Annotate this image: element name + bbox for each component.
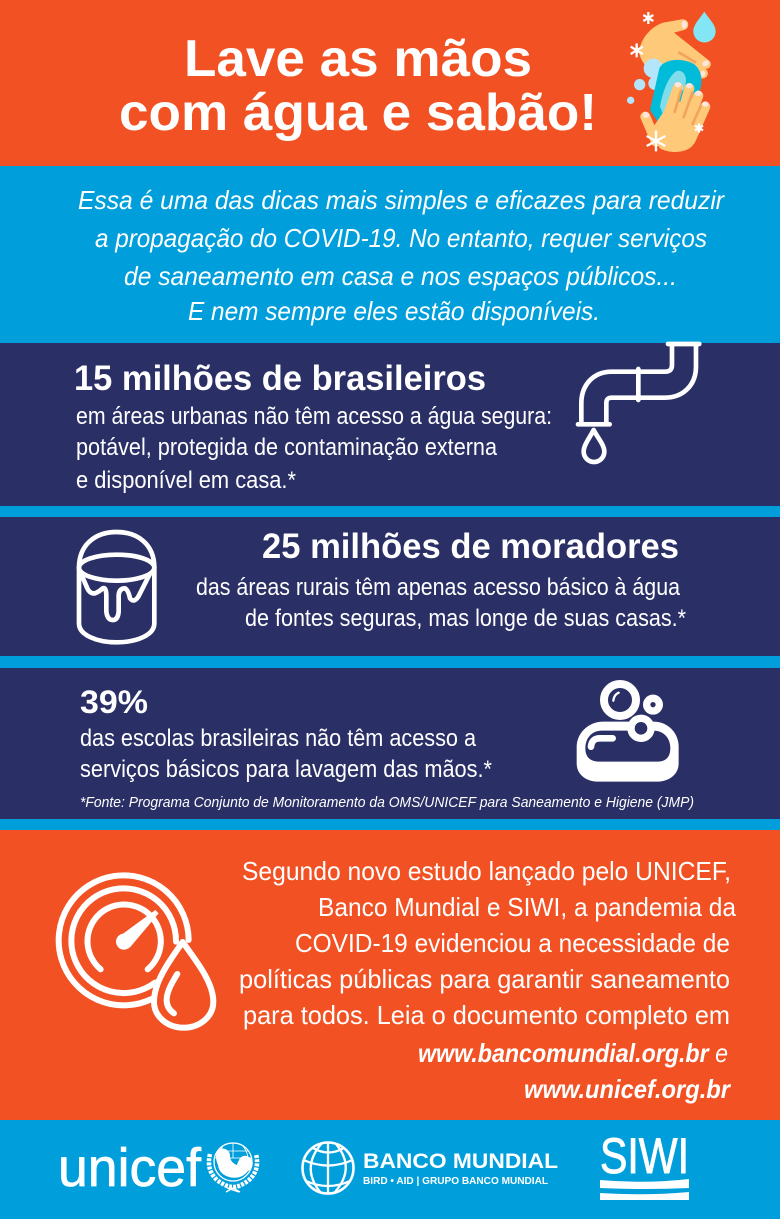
logo: Banco Mundial [302, 1142, 558, 1194]
icon: washing hands with soap [627, 12, 716, 152]
text block: study: para todos. Leia o documento completo em [243, 1000, 730, 1030]
icon: dripping pipe [578, 344, 699, 462]
text block: rural water: de fontes seguras, mas longe de suas casas.* [245, 605, 686, 632]
panel: urban water statistic [0, 343, 780, 506]
title [119, 30, 597, 142]
text block: study: Banco Mundial e SIWI, a pandemia da [318, 892, 737, 922]
logo: SIWI: SIWI [600, 1128, 689, 1184]
logo: Banco Mundial: BANCO MUNDIAL [363, 1150, 558, 1173]
panel: partner logos [0, 1120, 780, 1219]
source note: *Fonte: Programa Conjunto de Monitoramento da OMS/UNICEF para Saneamento e Higiene (JMP) [80, 794, 694, 811]
title: Lave as mãos [184, 30, 532, 88]
logo: Banco Mundial: BIRD • AID | GRUPO BANCO MUNDIAL [363, 1176, 548, 1187]
text block: urban water [76, 403, 552, 494]
text block: study: COVID-19 evidenciou a necessidade de [295, 928, 730, 958]
divider band [0, 506, 780, 517]
logo: SIWI [600, 1128, 689, 1200]
logo: unicef: unicef [58, 1138, 202, 1198]
title: com água e sabão! [119, 84, 597, 142]
panel: title header [0, 0, 780, 166]
heading: 25 milhões: 25 milhões de moradores [262, 527, 679, 566]
icon: bucket [79, 532, 154, 642]
text block: introduction [78, 185, 725, 326]
text block: introduction: Essa é uma das dicas mais simples e eficazes para reduzir [78, 185, 725, 215]
panel: rural water statistic [0, 517, 780, 656]
heading: 15 milhões: 15 milhões de brasileiros [74, 359, 486, 398]
text block: schools: das escolas brasileiras não têm acesso a [80, 725, 477, 752]
text block: rural water: das áreas rurais têm apenas acesso básico à água [196, 574, 681, 601]
text block: introduction: E nem sempre eles estão disponíveis. [188, 296, 600, 326]
icon: globe [302, 1142, 354, 1194]
icon: soap and bubbles [577, 684, 679, 782]
icon: gauge with water drop [59, 875, 213, 1028]
text block: study: Segundo novo estudo lançado pelo UNICEF, [242, 856, 731, 886]
panel: schools statistic [0, 668, 780, 819]
text block: study: políticas públicas para garantir saneamento [239, 964, 730, 994]
heading: 39%: 39% [80, 684, 148, 720]
text block: introduction: a propagação do COVID-19. No entanto, requer serviços [95, 223, 707, 253]
panel: study call to action [0, 830, 780, 1120]
text block: urban water: potável, protegida de contaminação externa [76, 434, 498, 461]
text block: urban water: em áreas urbanas não têm acesso a água segura: [76, 403, 552, 430]
text block: schools [80, 725, 492, 783]
icon: unicef emblem [209, 1143, 257, 1192]
text block: schools: serviços básicos para lavagem das mãos.* [80, 756, 492, 783]
divider band [0, 656, 780, 668]
text block: introduction: de saneamento em casa e nos espaços públicos... [124, 261, 677, 291]
text block: study: www.unicef.org.br [524, 1074, 732, 1104]
panel: introduction [0, 166, 780, 343]
text block: rural water [196, 574, 686, 632]
divider band [0, 819, 780, 830]
text block: study [239, 856, 737, 1104]
text block: urban water: e disponível em casa.* [76, 467, 296, 494]
text block: study: www.bancomundial.org.br e [418, 1038, 728, 1068]
